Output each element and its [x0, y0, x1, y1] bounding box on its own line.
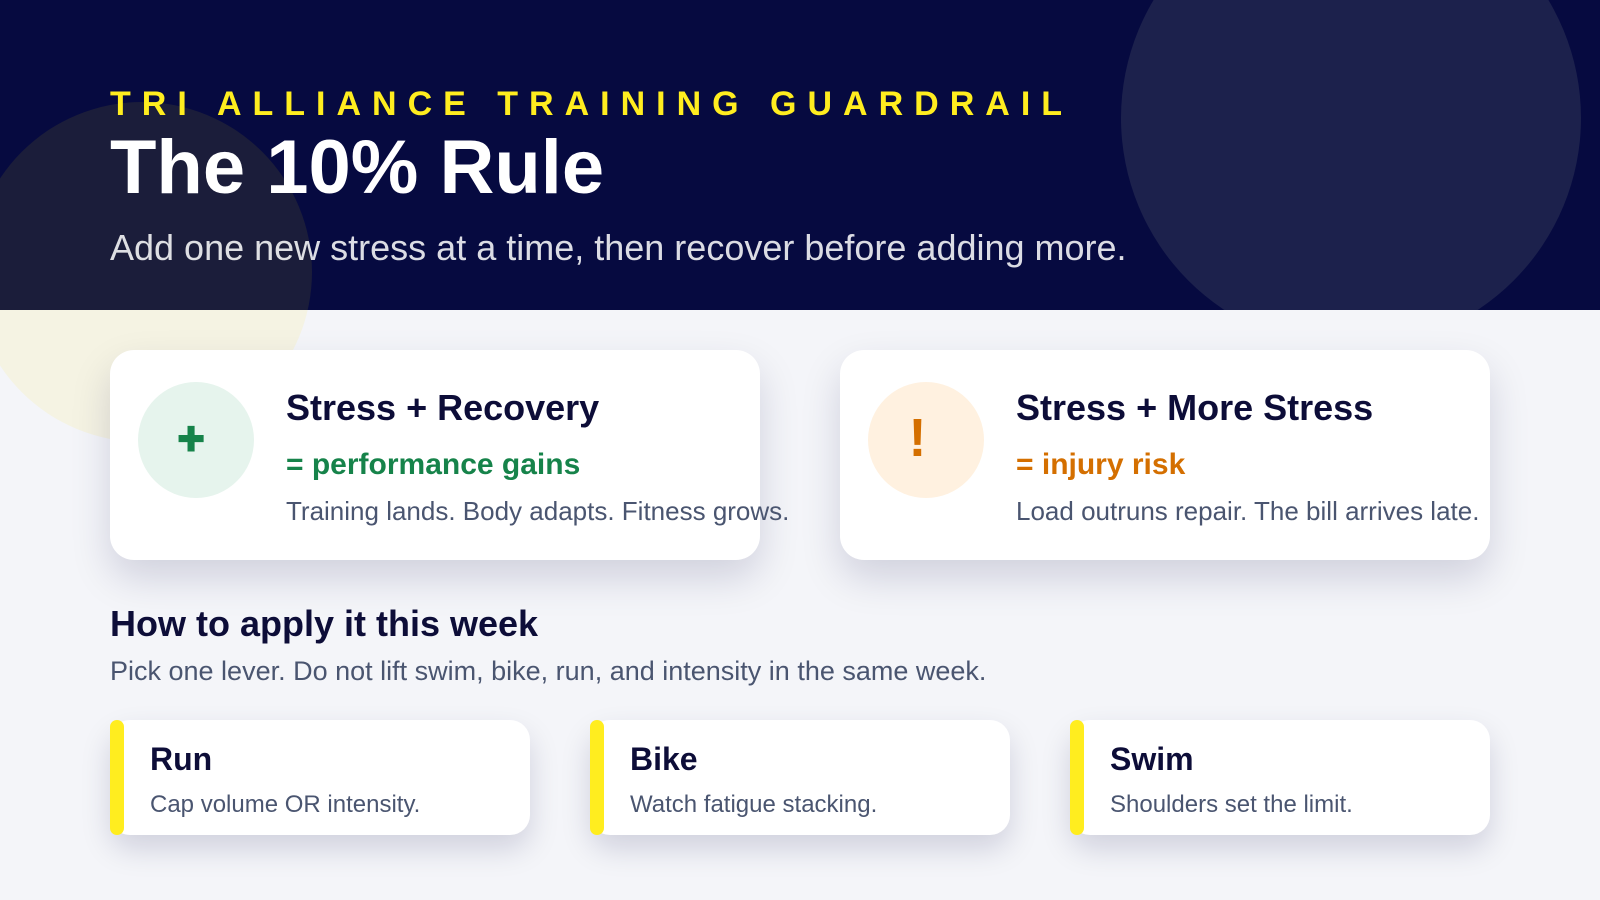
card: bike — [590, 720, 1010, 835]
panel: stress + more stress — [840, 350, 1490, 560]
description: Load outruns repair. The bill arrives late. — [1016, 496, 1479, 526]
description: Training lands. Body adapts. Fitness grows. — [286, 496, 789, 526]
bike tip: Watch fatigue stacking. — [630, 791, 877, 818]
decorative circle: left — [0, 102, 312, 442]
result: injury risk: = injury risk — [1016, 448, 1185, 480]
eyebrow: TRI ALLIANCE TRAINING GUARDRAIL — [110, 85, 1073, 123]
card heading: Stress + Recovery — [286, 387, 599, 428]
accent bar — [110, 720, 124, 835]
accent bar — [1070, 720, 1084, 835]
header band — [0, 0, 1600, 310]
bike label: Bike — [630, 741, 698, 777]
panel: stress + recovery — [110, 350, 760, 560]
run tip: Cap volume OR intensity. — [150, 791, 420, 818]
accent bar — [590, 720, 604, 835]
icon: plus: + — [178, 412, 204, 464]
swim label: Swim — [1110, 741, 1194, 777]
swim tip: Shoulders set the limit. — [1110, 791, 1353, 818]
card: run — [110, 720, 530, 835]
decorative circle: header right — [1121, 0, 1581, 348]
subtitle: Add one new stress at a time, then recover before adding more. — [110, 227, 1127, 268]
card heading: Stress + More Stress — [1016, 387, 1373, 428]
section heading: How to apply it this week — [110, 603, 538, 644]
title: The 10% Rule — [110, 124, 604, 210]
card: swim — [1070, 720, 1490, 835]
icon: exclamation: ! — [908, 408, 926, 468]
run label: Run — [150, 741, 212, 777]
section description: Pick one lever. Do not lift swim, bike, run, and intensity in the same week. — [110, 656, 986, 686]
icon: plus — [138, 382, 254, 498]
icon: exclamation — [868, 382, 984, 498]
result: performance gains: = performance gains — [286, 448, 580, 480]
